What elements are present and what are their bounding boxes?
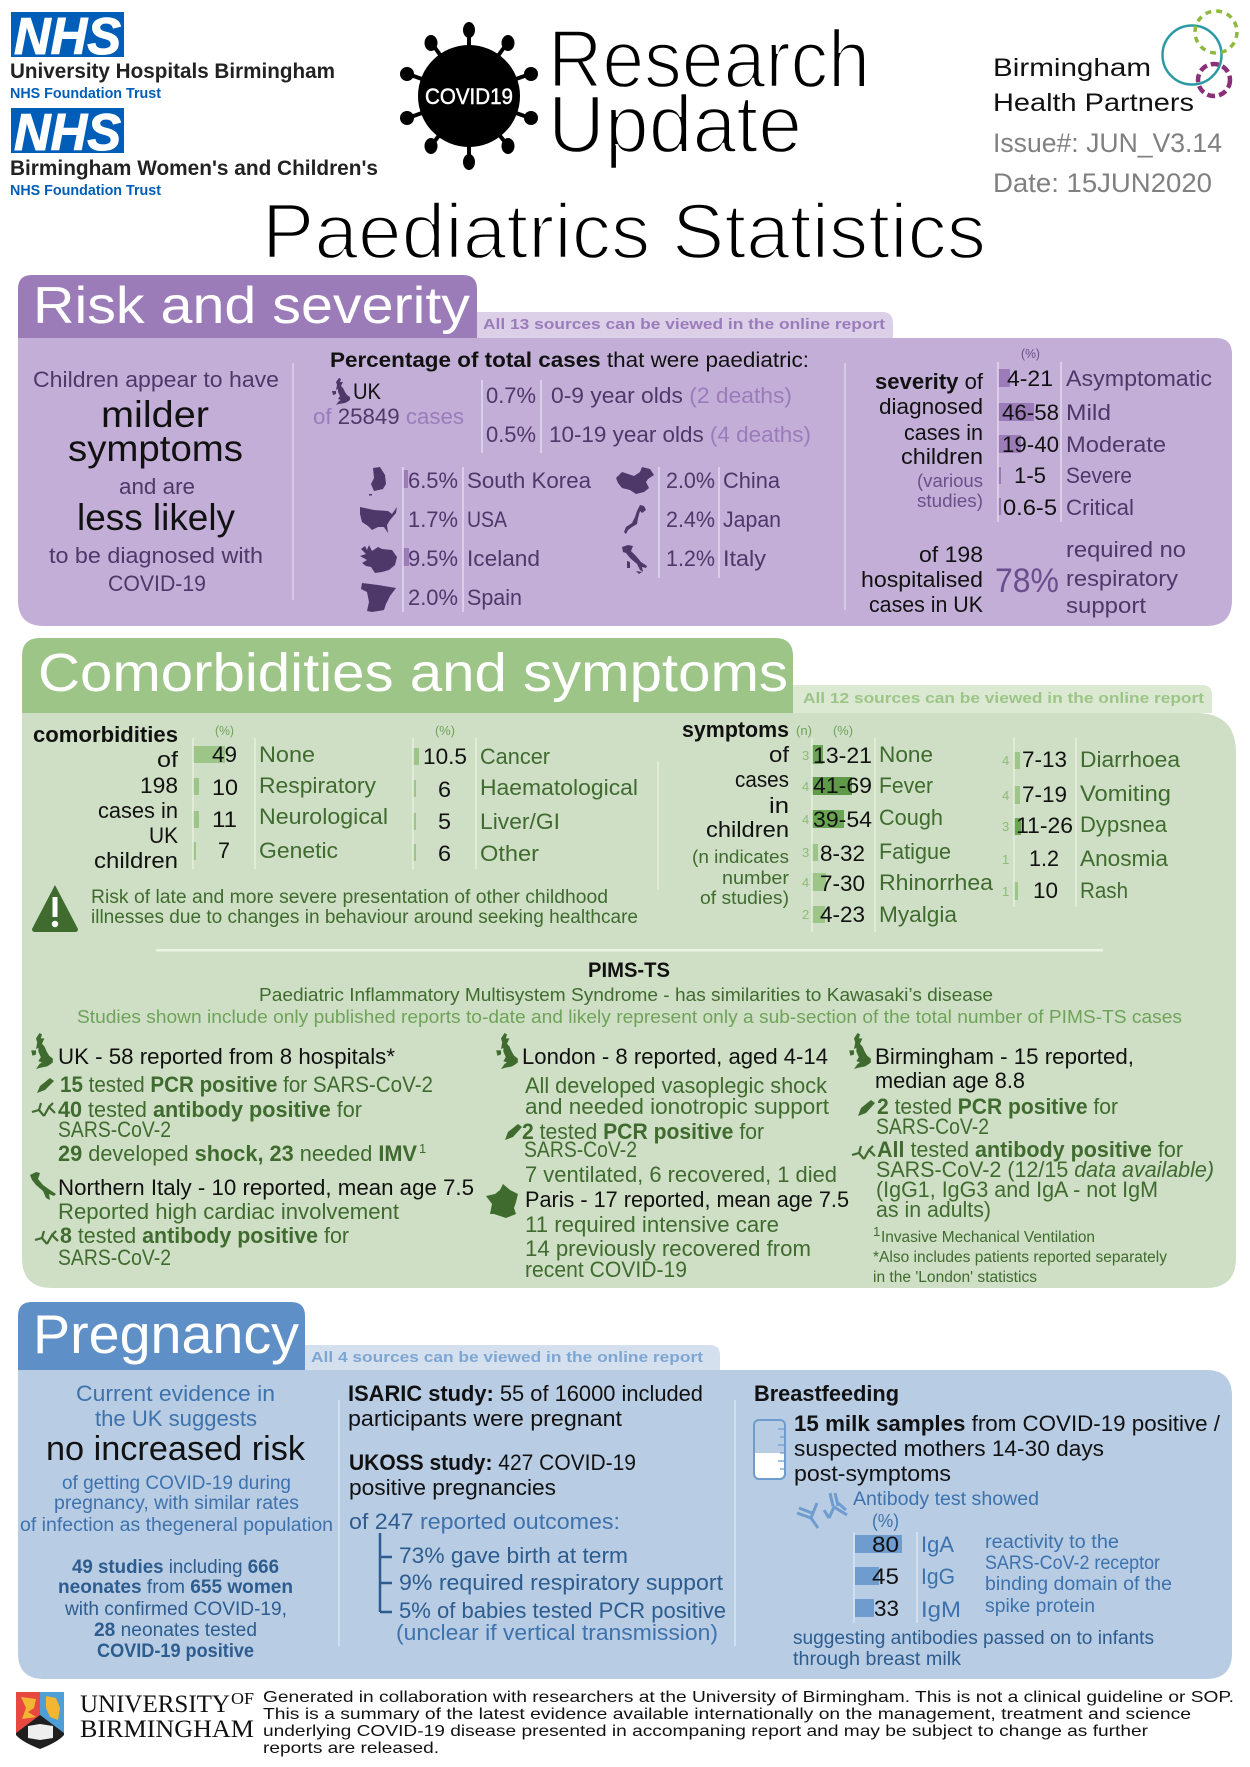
chart: symptoms column 2: 7-13 bbox=[1022, 747, 1067, 772]
chart: antibody test results: spike protein bbox=[985, 1596, 1095, 1617]
sources note: All 12 sources can be viewed in the online report bbox=[803, 691, 1204, 707]
text block: no increased risk: of getting COVID-19 during bbox=[62, 1473, 291, 1494]
text block: milder symptoms summary: less likely bbox=[77, 497, 235, 538]
chart: antibody test results: IgG bbox=[921, 1564, 955, 1589]
icon: antibody bbox=[32, 1103, 55, 1116]
heading: Comorbidities and symptoms: Comorbidities and symptoms bbox=[38, 643, 788, 703]
footer disclaimer: Generated in collaboration with researchers at the University of Birmingham. This is not a clinical guideline or SOP. bbox=[263, 1689, 1234, 1706]
PIMS column 1: UK and Northern Italy: 29 developed shock, 23 needed IMV bbox=[58, 1141, 417, 1166]
UK paediatric percentages: 0.5% bbox=[486, 422, 536, 447]
country percentages, right column: 1.2% bbox=[666, 546, 715, 571]
chart: symptoms column 1: 3 bbox=[802, 748, 809, 763]
chart: severity ranges: 46-58 bbox=[1002, 400, 1059, 425]
text block: symptoms of cases in children: symptoms bbox=[682, 717, 789, 742]
callout: risk of late presentation bbox=[91, 887, 638, 928]
text block: suggesting antibodies passed on: through breast milk bbox=[793, 1649, 962, 1670]
country percentages, left column: 6.5% bbox=[408, 468, 458, 493]
chart: severity ranges bbox=[998, 346, 1212, 522]
icon: Iceland bbox=[360, 545, 397, 573]
icon: PCR swab bbox=[505, 1124, 522, 1140]
chart: symptoms column 1: None bbox=[879, 742, 933, 767]
PIMS column 1: UK and Northern Italy bbox=[30, 1033, 474, 1270]
PIMS column 3: Birmingham: SARS-CoV-2 bbox=[876, 1114, 989, 1139]
text block: suggesting antibodies passed on: suggesting antibodies passed on to infants bbox=[793, 1628, 1154, 1649]
text block: ISARIC and UKOSS studies bbox=[348, 1381, 726, 1645]
PIMS column 2: London and Paris: 7 ventilated, 6 recovered, 1 died bbox=[525, 1162, 837, 1187]
chart: severity ranges: 1-5 bbox=[1014, 463, 1046, 488]
text block: ISARIC and UKOSS studies: participants were pregnant bbox=[348, 1406, 622, 1431]
UK paediatric percentages: UK bbox=[353, 379, 381, 404]
country percentages, left column bbox=[360, 467, 592, 612]
panel: risk and severity bbox=[18, 275, 1232, 626]
severity text: (various bbox=[917, 471, 983, 491]
chart: comorbidities column 1: Genetic bbox=[259, 838, 338, 863]
chart: symptoms column 2: Rash bbox=[1080, 878, 1128, 903]
text block: 49 studies neonates: neonates from 655 women bbox=[58, 1577, 293, 1598]
chart: symptoms column 2: Vomiting bbox=[1080, 781, 1171, 806]
heading: PIMS-TS: Studies shown include only published reports to-date and likely represent only a sub-section of the total number of PIMS-TS cases bbox=[77, 1007, 1182, 1027]
logo: NHS University Hospitals Birmingham: NHS Foundation Trust bbox=[10, 86, 161, 102]
chart: severity ranges: Severe bbox=[1066, 463, 1132, 488]
severity text: cases in bbox=[904, 420, 983, 445]
chart: antibody test results: SARS-CoV-2 receptor bbox=[985, 1553, 1161, 1574]
text block: breastfeeding: 15 milk samples from COVID-19 positive / bbox=[794, 1411, 1221, 1436]
text block: milder symptoms summary: Children appear to have bbox=[33, 367, 279, 392]
callout: 78% required no respiratory support: support bbox=[1066, 593, 1146, 618]
chart: severity ranges: 4-21 bbox=[1007, 366, 1053, 391]
icon: Italy bbox=[622, 545, 647, 574]
chart: severity ranges: 0.6-5 bbox=[1003, 495, 1057, 520]
chart: antibody test results: 33 bbox=[874, 1596, 899, 1621]
text block: ISARIC and UKOSS studies: 9% required respiratory support bbox=[399, 1570, 723, 1595]
PIMS column 3: Birmingham: (IgG1, IgG3 and IgA - not IgM bbox=[876, 1177, 1158, 1202]
chart: comorbidities column 1: 11 bbox=[212, 807, 237, 832]
text block: symptoms of cases in children: of bbox=[769, 742, 790, 767]
text block: 49 studies neonates bbox=[58, 1557, 293, 1662]
chart: comorbidities column 2: 6 bbox=[438, 841, 451, 866]
text block: breastfeeding: Breastfeeding bbox=[754, 1381, 899, 1406]
chart: symptoms column 2 bbox=[1002, 738, 1181, 907]
PIMS column 3: Birmingham: 2 tested PCR positive for bbox=[877, 1094, 1118, 1119]
country percentages, right column: Italy bbox=[723, 546, 766, 571]
sources note: All 13 sources can be viewed in the online report bbox=[483, 317, 885, 333]
callout: risk of late presentation: illnesses due to changes in behaviour around seeking healthcare bbox=[91, 907, 638, 928]
footer disclaimer: This is a summary of the latest evidence available internationally on the management, treatment and science bbox=[263, 1706, 1191, 1723]
chart: symptoms column 1: 4 bbox=[802, 875, 809, 890]
logo: NHS Birmingham Women's and Children's: NHS Foundation Trust bbox=[10, 183, 161, 199]
country percentages, right column bbox=[616, 467, 781, 578]
chart: comorbidities column 1: 49 bbox=[212, 742, 237, 767]
chart: symptoms column 1: Rhinorrhea bbox=[879, 870, 994, 895]
text block: no increased risk: of infection as thegeneral population bbox=[20, 1515, 333, 1536]
heading: PIMS-TS: PIMS-TS bbox=[588, 959, 670, 982]
chart: antibody test results: IgA bbox=[921, 1532, 954, 1557]
chart: antibody test results: 80 bbox=[872, 1532, 899, 1557]
callout: 78% required no respiratory support bbox=[861, 537, 1186, 618]
chart: comorbidities column 2 bbox=[413, 723, 638, 869]
icon: PCR swab bbox=[858, 1100, 875, 1116]
chart: symptoms column 2: Anosmia bbox=[1080, 846, 1169, 871]
text block: milder symptoms summary: and are bbox=[119, 474, 195, 499]
UK paediatric percentages bbox=[313, 378, 811, 453]
text block: breastfeeding bbox=[754, 1381, 1221, 1486]
text block: breastfeeding: post-symptoms bbox=[794, 1461, 951, 1486]
issue and date bbox=[993, 128, 1222, 198]
issue and date: Date: 15JUN2020 bbox=[993, 168, 1212, 198]
icon: PCR swab bbox=[37, 1078, 54, 1093]
PIMS column 1: UK and Northern Italy: SARS-CoV-2 bbox=[58, 1117, 171, 1142]
country percentages, right column: 2.0% bbox=[666, 468, 715, 493]
UK paediatric percentages: 0-9 year olds (2 deaths) bbox=[551, 383, 792, 408]
text block: ISARIC and UKOSS studies: ISARIC study: 55 of 16000 included bbox=[348, 1381, 703, 1406]
PIMS column 1: UK and Northern Italy: Northern Italy - 10 reported, mean age 7.5 bbox=[58, 1175, 474, 1200]
chart: severity ranges: Moderate bbox=[1066, 432, 1166, 457]
PIMS column 1: UK and Northern Italy: 8 tested antibody positive for bbox=[60, 1223, 349, 1248]
title: Research Update: Research bbox=[548, 14, 870, 105]
title: Research Update: Update bbox=[548, 79, 802, 170]
text block: milder symptoms summary: COVID-19 bbox=[108, 571, 206, 596]
logo: Birmingham Health Partners: Health Partners bbox=[993, 89, 1194, 117]
text block: ISARIC and UKOSS studies: of 247 reported outcomes: bbox=[349, 1509, 620, 1534]
logo: NHS University Hospitals Birmingham: NHS bbox=[14, 8, 121, 66]
PIMS column 2: London and Paris: 14 previously recovered from bbox=[525, 1236, 811, 1261]
PIMS column 3: Birmingham: All tested antibody positive for bbox=[877, 1137, 1183, 1162]
heading: Risk and severity: Risk and severity bbox=[33, 277, 470, 335]
callout: 78% required no respiratory support: required no bbox=[1066, 537, 1186, 562]
logo: NHS University Hospitals Birmingham bbox=[10, 8, 335, 102]
footnotes: 1 bbox=[873, 1224, 880, 1239]
text block: no increased risk: no increased risk bbox=[46, 1430, 306, 1468]
chart: severity ranges: 19-40 bbox=[1002, 432, 1059, 457]
chart: symptoms column 2: Diarrhoea bbox=[1080, 747, 1181, 772]
chart: symptoms column 2: 1.2 bbox=[1029, 846, 1059, 871]
text block: milder symptoms summary bbox=[33, 367, 279, 596]
heading: Paediatrics Statistics: Paediatrics Statistics bbox=[262, 187, 986, 275]
heading: Pregnancy: Pregnancy bbox=[33, 1303, 299, 1365]
callout: 78% required no respiratory support: hospitalised bbox=[861, 567, 983, 592]
chart: antibody test results bbox=[853, 1489, 1172, 1623]
text block: comorbidities of 198 cases: comorbidities bbox=[33, 722, 178, 747]
PIMS column 1: UK and Northern Italy: UK - 58 reported from 8 hospitals* bbox=[58, 1044, 395, 1069]
logo: University of Birmingham crest and wordmark: OF bbox=[231, 1689, 254, 1708]
text block: milder symptoms summary: to be diagnosed with bbox=[49, 543, 263, 568]
text block: symptoms of cases in children: children bbox=[706, 817, 789, 842]
chart: symptoms column 1: (n) bbox=[796, 723, 812, 738]
text block: ISARIC and UKOSS studies: (unclear if vertical transmission) bbox=[396, 1620, 718, 1645]
severity text: diagnosed bbox=[879, 394, 983, 419]
callout: 78% required no respiratory support: cases in UK bbox=[869, 592, 983, 617]
PIMS column 3: Birmingham: as in adults) bbox=[876, 1197, 991, 1222]
logo: NHS Birmingham Women's and Children's bbox=[10, 104, 378, 199]
chart: comorbidities column 1: (%) bbox=[215, 723, 234, 738]
text block: comorbidities of 198 cases bbox=[33, 722, 179, 873]
chart: antibody test results: reactivity to the bbox=[985, 1532, 1119, 1553]
chart: symptoms column 1 bbox=[796, 723, 994, 932]
text block: comorbidities of 198 cases: of bbox=[157, 747, 179, 772]
UK paediatric percentages: 10-19 year olds (4 deaths) bbox=[549, 422, 811, 447]
icon: antibodies bbox=[797, 1493, 847, 1528]
text block: 49 studies neonates: 49 studies including 666 bbox=[72, 1557, 279, 1578]
chart: symptoms column 2: 4 bbox=[1002, 753, 1009, 768]
footer disclaimer: reports are released. bbox=[263, 1740, 439, 1757]
text block: 49 studies neonates: COVID-19 positive bbox=[97, 1641, 254, 1662]
text block: ISARIC and UKOSS studies: positive pregnancies bbox=[349, 1475, 556, 1500]
footnotes bbox=[873, 1224, 1167, 1286]
text block: no increased risk: the UK suggests bbox=[95, 1406, 257, 1431]
country percentages, right column: China bbox=[723, 468, 781, 493]
icon: antibody bbox=[35, 1231, 58, 1244]
country percentages, right column: 2.4% bbox=[666, 507, 715, 532]
heading: percentage of total cases: Percentage of total cases that were paediatric: bbox=[330, 349, 809, 372]
chart: symptoms column 2: 4 bbox=[1002, 788, 1009, 803]
PIMS column 2: London and Paris: All developed vasoplegic shock bbox=[525, 1073, 828, 1098]
footer disclaimer: underlying COVID-19 disease presented in accompaning report and may be subject to change as further bbox=[263, 1723, 1149, 1740]
PIMS column 3: Birmingham bbox=[849, 1033, 1214, 1222]
icon: milk sample tube bbox=[754, 1420, 785, 1479]
text block: milder symptoms summary: symptoms bbox=[68, 428, 243, 469]
heading: PIMS-TS bbox=[77, 959, 1182, 1027]
chart: comorbidities column 2: 10.5 bbox=[423, 744, 467, 769]
chart: severity ranges: Mild bbox=[1066, 400, 1111, 425]
logo: Birmingham Health Partners: Birmingham bbox=[993, 54, 1151, 82]
text block: ISARIC and UKOSS studies: 5% of babies tested PCR positive bbox=[399, 1598, 726, 1623]
icon: antibody bbox=[852, 1146, 875, 1159]
severity text: severity of bbox=[875, 369, 984, 394]
country percentages, right column: Japan bbox=[723, 507, 781, 532]
footnotes: in the 'London' statistics bbox=[873, 1269, 1037, 1286]
icon: South Korea bbox=[369, 467, 386, 496]
text block: ISARIC and UKOSS studies: 73% gave birth at term bbox=[399, 1543, 628, 1568]
issue and date: Issue#: JUN_V3.14 bbox=[993, 128, 1222, 158]
chart: symptoms column 1: 13-21 bbox=[813, 743, 872, 768]
chart: symptoms column 1: Fatigue bbox=[879, 839, 951, 864]
icon: warning triangle bbox=[32, 885, 78, 932]
PIMS column 1: UK and Northern Italy: Reported high cardiac involvement bbox=[58, 1199, 399, 1224]
chart: symptoms column 1: 4 bbox=[802, 812, 809, 827]
icon: Italy map bbox=[30, 1172, 56, 1200]
heading: PIMS-TS: Paediatric Inflammatory Multisystem Syndrome - has similarities to Kawasaki’s disease bbox=[259, 985, 993, 1005]
chart: comorbidities column 1: Respiratory bbox=[259, 773, 376, 798]
text block: symptoms of cases in children bbox=[682, 717, 790, 908]
chart: comorbidities column 2: (%) bbox=[435, 723, 455, 738]
chart: comorbidities column 1: 10 bbox=[212, 775, 238, 800]
chart: symptoms column 2: 7-19 bbox=[1022, 782, 1067, 807]
PIMS column 2: London and Paris: and needed ionotropic support bbox=[525, 1094, 829, 1119]
title: Research Update bbox=[548, 14, 870, 170]
PIMS column 3: Birmingham: SARS-CoV-2 (12/15 data available) bbox=[876, 1157, 1214, 1182]
text block: comorbidities of 198 cases: children bbox=[94, 848, 178, 873]
chart: symptoms column 1: 39-54 bbox=[813, 807, 872, 832]
icon: France map bbox=[486, 1184, 518, 1218]
chart: comorbidities column 2: Other bbox=[480, 841, 539, 866]
PIMS column 2: London and Paris: recent COVID-19 bbox=[525, 1257, 687, 1282]
panel: pregnancy bbox=[18, 1302, 1232, 1679]
icon: Spain bbox=[361, 583, 396, 612]
PIMS column 1: UK and Northern Italy: 15 tested PCR positive for SARS-CoV-2 bbox=[60, 1072, 433, 1097]
callout: 78% required no respiratory support: 78% bbox=[995, 562, 1059, 600]
chart: severity ranges: Asymptomatic bbox=[1066, 366, 1212, 391]
icon: USA bbox=[360, 507, 397, 533]
icon: UK map bbox=[31, 1033, 53, 1069]
chart: severity ranges: Critical bbox=[1066, 495, 1134, 520]
chart: symptoms column 1: Cough bbox=[879, 805, 943, 830]
country percentages, left column: 1.7% bbox=[408, 507, 458, 532]
chart: comorbidities column 2: Cancer bbox=[480, 744, 550, 769]
chart: antibody test results: binding domain of the bbox=[985, 1574, 1172, 1595]
chart: comorbidities column 2: Haematological bbox=[480, 775, 638, 800]
PIMS column 2: London and Paris: SARS-CoV-2 bbox=[524, 1137, 637, 1162]
callout: 78% required no respiratory support: of 198 bbox=[919, 542, 983, 567]
chart: symptoms column 1: (%) bbox=[833, 723, 853, 738]
logo: University of Birmingham crest and wordmark bbox=[16, 1689, 254, 1749]
country percentages, left column: Spain bbox=[467, 585, 522, 610]
chart: severity ranges: (%) bbox=[1021, 346, 1040, 361]
chart: comorbidities column 2: 6 bbox=[438, 777, 451, 802]
chart: symptoms column 2: Dypsnea bbox=[1080, 812, 1168, 837]
chart: antibody test results: 45 bbox=[872, 1564, 899, 1589]
PIMS column 2: London and Paris: 11 required intensive care bbox=[525, 1212, 779, 1237]
chart: symptoms column 1: 41-69 bbox=[813, 773, 872, 798]
callout: risk of late presentation: Risk of late and more severe presentation of other childhood bbox=[91, 887, 608, 908]
text block: comorbidities of 198 cases: 198 bbox=[140, 773, 178, 798]
callout: 78% required no respiratory support: respiratory bbox=[1066, 566, 1178, 591]
chart: symptoms column 1: Myalgia bbox=[879, 902, 958, 927]
sources note: All 4 sources can be viewed in the online report bbox=[311, 1350, 703, 1366]
severity text bbox=[875, 369, 984, 511]
chart: symptoms column 2: 11-26 bbox=[1016, 813, 1073, 838]
PIMS column 3: Birmingham: Birmingham - 15 reported, bbox=[875, 1044, 1134, 1069]
chart: comorbidities column 1: Neurological bbox=[259, 804, 388, 829]
text block: 49 studies neonates: with confirmed COVID-19, bbox=[64, 1599, 287, 1620]
text block: no increased risk: Current evidence in bbox=[76, 1381, 275, 1406]
chart: comorbidities column 2: 5 bbox=[438, 809, 451, 834]
chart: antibody test results: (%) bbox=[872, 1511, 899, 1531]
footnotes: *Also includes patients reported separately bbox=[873, 1249, 1167, 1266]
text block: symptoms of cases in children: number bbox=[722, 868, 789, 888]
chart: comorbidities column 1: None bbox=[259, 742, 315, 767]
PIMS column 2: London and Paris: London - 8 reported, aged 4-14 bbox=[522, 1044, 828, 1069]
text block: no increased risk bbox=[20, 1381, 333, 1536]
text block: symptoms of cases in children: (n indicates bbox=[692, 847, 789, 867]
chart: symptoms column 2: 1 bbox=[1002, 884, 1009, 899]
logo: University of Birmingham crest and wordmark: UNIVERSITY bbox=[80, 1691, 230, 1718]
chart: symptoms column 1: 4 bbox=[802, 779, 809, 794]
PIMS column 2: London and Paris: 2 tested PCR positive for bbox=[522, 1119, 764, 1144]
icon: coronavirus with COVID19 label: COVID19 bbox=[425, 84, 513, 109]
icon: UK map bbox=[849, 1033, 871, 1069]
text block: no increased risk: pregnancy, with similar rates bbox=[54, 1493, 299, 1514]
bracket: outcomes list bbox=[380, 1533, 392, 1612]
PIMS column 1: UK and Northern Italy: 1 bbox=[419, 1141, 426, 1156]
icon: coronavirus with COVID19 label bbox=[400, 22, 538, 170]
PIMS column 2: London and Paris bbox=[486, 1033, 849, 1282]
chart: comorbidities column 2: Liver/GI bbox=[480, 809, 560, 834]
footnotes: Invasive Mechanical Ventilation bbox=[881, 1229, 1095, 1246]
chart: antibody test results: IgM bbox=[921, 1597, 961, 1622]
chart: comorbidities column 1 bbox=[193, 723, 388, 869]
panel: comorbidities and symptoms bbox=[22, 638, 1236, 1288]
country percentages, left column: USA bbox=[467, 507, 507, 532]
chart: symptoms column 2: 10 bbox=[1033, 878, 1058, 903]
PIMS column 3: Birmingham: median age 8.8 bbox=[875, 1068, 1025, 1093]
text block: breastfeeding: suspected mothers 14-30 days bbox=[794, 1436, 1104, 1461]
chart: symptoms column 2: 3 bbox=[1002, 819, 1009, 834]
text block: symptoms of cases in children: of studies) bbox=[700, 888, 789, 908]
text block: comorbidities of 198 cases: UK bbox=[149, 823, 178, 848]
text block: milder symptoms summary: milder bbox=[101, 394, 209, 435]
logo: Birmingham Health Partners bbox=[993, 11, 1237, 117]
logo: NHS University Hospitals Birmingham: University Hospitals Birmingham bbox=[10, 60, 335, 83]
severity text: studies) bbox=[917, 491, 983, 511]
country percentages, left column: Iceland bbox=[467, 546, 540, 571]
footer disclaimer bbox=[263, 1689, 1234, 1757]
PIMS column 1: UK and Northern Italy: SARS-CoV-2 bbox=[58, 1245, 171, 1270]
country percentages, left column: South Korea bbox=[467, 468, 592, 493]
chart: symptoms column 2: 1 bbox=[1002, 852, 1009, 867]
UK paediatric percentages: 0.7% bbox=[486, 383, 536, 408]
chart: symptoms column 1: Fever bbox=[879, 773, 933, 798]
chart: comorbidities column 1: 7 bbox=[218, 838, 230, 863]
country percentages, left column: 2.0% bbox=[408, 585, 458, 610]
logo: NHS Birmingham Women's and Children's: Birmingham Women's and Children's bbox=[10, 157, 378, 180]
text block: 49 studies neonates: 28 neonates tested bbox=[94, 1620, 257, 1641]
country percentages, left column: 9.5% bbox=[408, 546, 458, 571]
chart: antibody test results: Antibody test showed bbox=[853, 1489, 1039, 1510]
text block: symptoms of cases in children: cases bbox=[735, 767, 789, 792]
chart: symptoms column 1: 8-32 bbox=[820, 841, 865, 866]
chart: symptoms column 1: 4-23 bbox=[820, 902, 865, 927]
PIMS column 1: UK and Northern Italy: 40 tested antibody positive for bbox=[58, 1097, 362, 1122]
icon: UK map bbox=[496, 1033, 518, 1069]
chart: symptoms column 1: 7-30 bbox=[820, 871, 865, 896]
text block: symptoms of cases in children: in bbox=[769, 793, 789, 818]
text block: comorbidities of 198 cases: cases in bbox=[98, 798, 178, 823]
logo: University of Birmingham crest and wordmark: BIRMINGHAM bbox=[80, 1716, 254, 1743]
text block: ISARIC and UKOSS studies: UKOSS study: 427 COVID-19 bbox=[349, 1450, 636, 1475]
PIMS column 2: London and Paris: Paris - 17 reported, mean age 7.5 bbox=[525, 1187, 849, 1212]
chart: symptoms column 1: 3 bbox=[802, 845, 809, 860]
UK paediatric percentages: of 25849 cases bbox=[313, 404, 464, 429]
severity text: children bbox=[901, 444, 983, 469]
icon: China bbox=[616, 467, 654, 494]
chart: symptoms column 1: 2 bbox=[802, 907, 809, 922]
logo: NHS Birmingham Women's and Children's: NHS bbox=[14, 104, 121, 162]
text block: suggesting antibodies passed on bbox=[793, 1628, 1154, 1670]
icon: Japan bbox=[624, 505, 646, 534]
